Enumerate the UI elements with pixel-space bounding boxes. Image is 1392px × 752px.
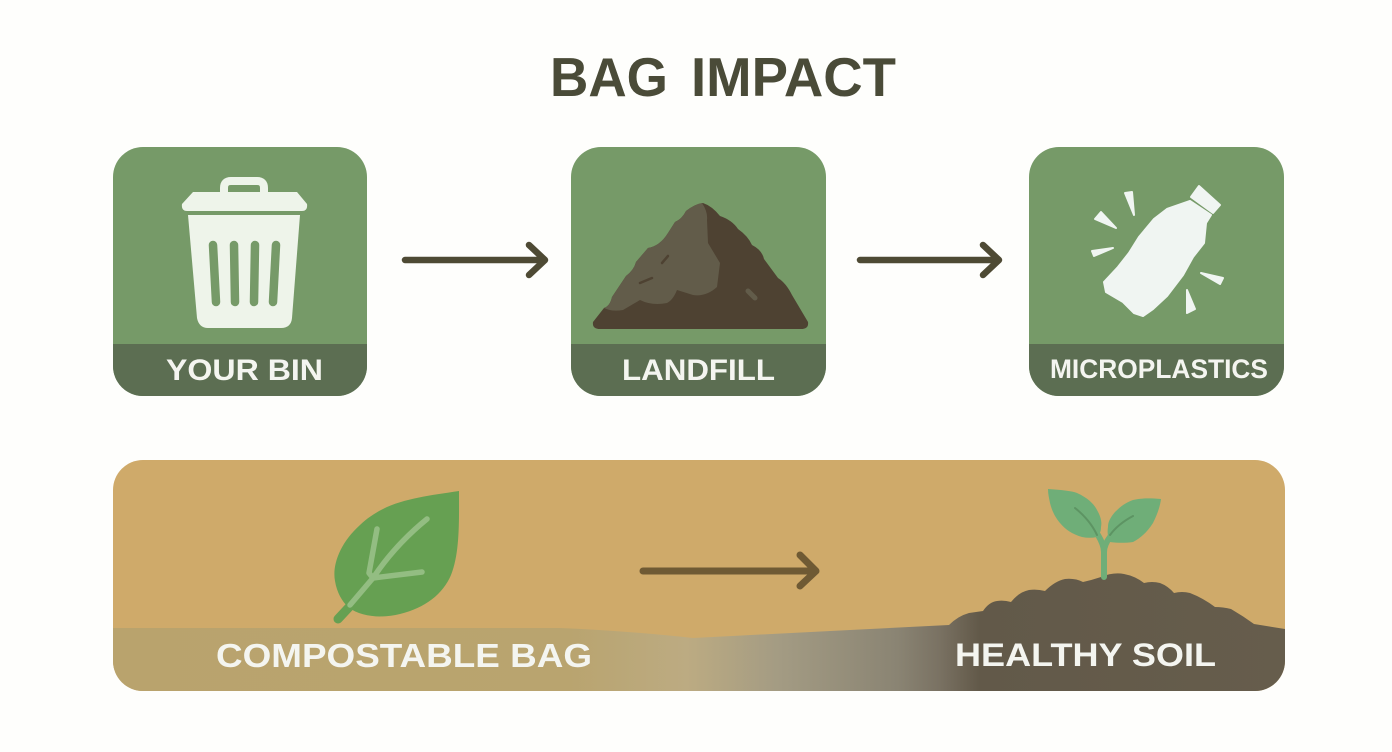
ground band with soil mound [113, 573, 1285, 691]
arrow: landfill to microplastics [860, 245, 999, 275]
label: your bin: YOUR BIN [166, 354, 323, 387]
label: landfill: LANDFILL [622, 354, 775, 387]
icon: leaf [334, 491, 459, 619]
icon: trash bin [182, 181, 307, 328]
label: microplastics: MICROPLASTICS [1050, 354, 1268, 384]
label: compostable bag: COMPOSTABLE BAG [216, 637, 592, 674]
panel: landfill [571, 147, 826, 396]
panel: your bin [113, 147, 367, 396]
panel: compost path [113, 460, 1285, 691]
icon: sprout [1048, 489, 1161, 577]
arrow: bin to landfill [405, 245, 545, 275]
title: IMPACT [691, 46, 896, 108]
arrow: compost to soil [643, 555, 816, 586]
title: BAG [550, 46, 668, 108]
title [550, 46, 896, 108]
icon: broken plastic bottle [1092, 186, 1223, 316]
label: healthy soil: HEALTHY SOIL [955, 637, 1216, 673]
panel: microplastics [1029, 147, 1284, 396]
icon: landfill mound [593, 203, 808, 329]
